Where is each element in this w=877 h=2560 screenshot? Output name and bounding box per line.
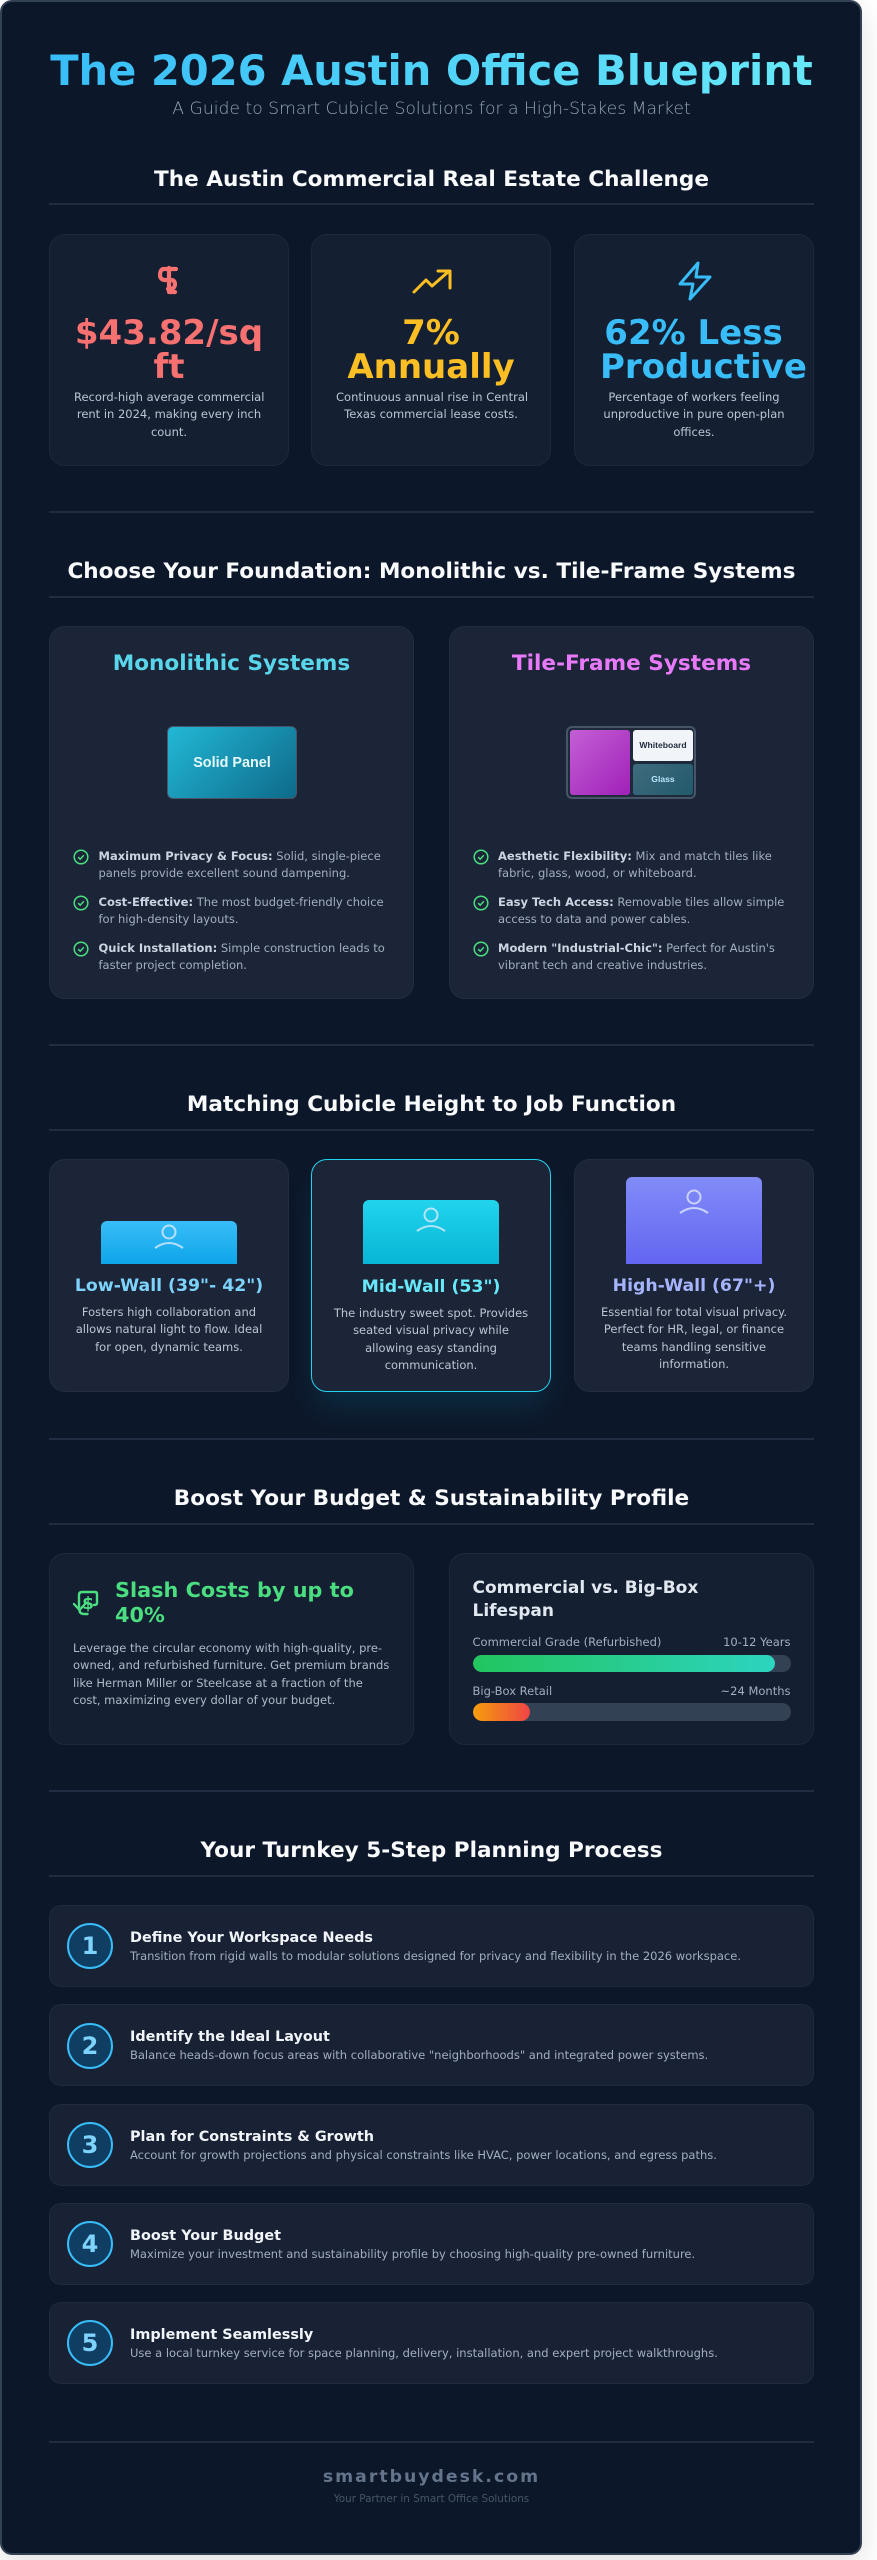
text: rent	[74, 390, 264, 439]
text: mid-wall: The industry sweet spot. Provides	[334, 1306, 528, 1320]
step 3 number: 3	[82, 2131, 98, 2159]
list: monolithic benefits: Cost-Effective: The most budget-friendly choice	[98, 895, 384, 909]
stat: lease: 7%	[402, 313, 460, 353]
list: tile-frame benefits: Modern "Industrial-Chic": Perfect for Austin's	[498, 941, 775, 955]
text: mid-wall: allowing easy standing	[365, 1341, 497, 1355]
panel: productivity stat	[574, 234, 814, 466]
stat: productivity: 62% Less	[604, 313, 783, 353]
step 5 text: Use a local turnkey service for space planning, delivery, installation, and expert project walkthroughs.	[130, 2346, 718, 2360]
text: low-wall	[76, 1305, 262, 1354]
stat: lease	[347, 313, 515, 387]
step 2 number: 2	[82, 2032, 98, 2060]
text: high-wall: Essential for total visual privacy.	[601, 1305, 787, 1319]
heading: slash costs: 40%	[115, 1603, 165, 1627]
heading: high-wall: High-Wall (67"+)	[613, 1276, 775, 1296]
tile frame graphic	[566, 726, 696, 799]
high wall graphic	[626, 1177, 762, 1264]
panel: monolithic	[49, 626, 414, 999]
tile frame graphic: Whiteboard	[639, 740, 687, 750]
bar chart: lifespan	[472, 1635, 791, 1721]
text: mid-wall: seated visual privacy while	[353, 1323, 509, 1337]
text: slash costs: cost, maximizing every dollar of your budget.	[73, 1693, 335, 1707]
heading: tile-frame: Tile-Frame Systems	[512, 651, 751, 676]
text: high-wall: Perfect for HR, legal, or finance	[604, 1322, 784, 1336]
text: productivity: Percentage of workers feeling	[608, 390, 780, 404]
panel: tile-frame	[449, 626, 814, 999]
step 5 title: Implement Seamlessly	[130, 2327, 313, 2343]
text: lease	[336, 390, 528, 421]
step 2 text: Balance heads-down focus areas with collaborative "neighborhoods" and integrated power systems.	[130, 2048, 708, 2062]
text: productivity	[603, 390, 785, 439]
step 3 number	[67, 2122, 113, 2168]
panel: rent stat	[49, 234, 289, 466]
title: The 2026 Austin Office Blueprint	[50, 46, 813, 95]
heading: monolithic: Monolithic Systems	[113, 651, 350, 676]
list: tile-frame benefits: access to data and power cables.	[498, 912, 690, 926]
tile frame graphic: Glass	[651, 774, 675, 784]
text: rent: count.	[151, 425, 187, 439]
list: monolithic benefits: Maximum Privacy & Focus: Solid, single-piece	[98, 849, 381, 863]
bar chart: lifespan: Big-Box Retail	[472, 1684, 552, 1698]
panel: lifespan	[449, 1553, 814, 1745]
step 4 title: Boost Your Budget	[130, 2228, 281, 2244]
text: slash costs	[73, 1641, 389, 1707]
text: slash costs: like Herman Miller or Steelcase at a fraction of the	[73, 1676, 363, 1690]
text: low-wall: Fosters high collaboration and	[82, 1305, 256, 1319]
step 1 text: Transition from rigid walls to modular solutions designed for privacy and flexibility in the 2026 workspace.	[130, 1949, 741, 1963]
panel: mid-wall	[311, 1159, 551, 1392]
list: tile-frame benefits	[473, 849, 784, 972]
heading: slash costs	[115, 1578, 354, 1627]
step 3	[49, 2104, 814, 2186]
text: mid-wall: communication.	[385, 1358, 477, 1372]
text: high-wall	[601, 1305, 787, 1371]
icon: lightning	[678, 262, 712, 300]
list: tile-frame benefits: vibrant tech and creative industries.	[498, 958, 707, 972]
step 4 text: Maximize your investment and sustainability profile by choosing high-quality pre-owned furniture.	[130, 2247, 695, 2261]
heading: slash costs: Slash Costs by up to	[115, 1578, 354, 1602]
bar chart: lifespan: 10-12 Years	[723, 1635, 790, 1649]
text: lease: Texas commercial lease costs.	[344, 407, 518, 421]
text: rent: Record-high average commercial	[74, 390, 264, 404]
list: monolithic benefits: for high-density layouts.	[98, 912, 239, 926]
step 5	[49, 2302, 814, 2384]
panel: low-wall	[49, 1159, 289, 1392]
icon: recycle dollar	[72, 1590, 98, 1616]
heading: lifespan: Lifespan	[472, 1601, 554, 1621]
stat: rent: $43.82/sq	[75, 313, 263, 353]
step 5 number: 5	[82, 2329, 98, 2357]
text: low-wall: for open, dynamic teams.	[95, 1340, 243, 1354]
subtitle: A Guide to Smart Cubicle Solutions for a High-Stakes Market	[172, 99, 691, 119]
icon: recycle dollar: $	[82, 1594, 94, 1614]
heading: challenge: The Austin Commercial Real Estate Challenge	[154, 167, 709, 192]
step 1 title: Define Your Workspace Needs	[130, 1930, 373, 1946]
heading: mid-wall: Mid-Wall (53")	[362, 1277, 500, 1297]
stat: rent	[75, 313, 263, 387]
step 4 number: 4	[82, 2230, 98, 2258]
bar chart: lifespan: Commercial Grade (Refurbished)	[472, 1635, 661, 1649]
step 1	[49, 1905, 814, 1987]
text: productivity: offices.	[673, 425, 715, 439]
list: monolithic benefits: faster project completion.	[98, 958, 247, 972]
list: tile-frame benefits: Aesthetic Flexibility: Mix and match tiles like	[498, 849, 772, 863]
text: slash costs: owned, and refurbished furniture. Get premium brands	[73, 1658, 389, 1672]
icon: dollar	[158, 266, 178, 294]
icon: trending up	[412, 270, 452, 294]
step 2 number	[67, 2023, 113, 2069]
heading: height: Matching Cubicle Height to Job Function	[187, 1092, 676, 1117]
text: high-wall: information.	[659, 1357, 729, 1371]
heading: lifespan: Commercial vs. Big-Box	[472, 1578, 698, 1598]
text: mid-wall	[334, 1306, 528, 1372]
text: high-wall: teams handling sensitive	[622, 1340, 766, 1354]
solid panel graphic: Solid Panel	[193, 755, 271, 771]
step 1 number	[67, 1923, 113, 1969]
low wall graphic	[101, 1221, 237, 1264]
stat: productivity: Productive	[600, 347, 807, 387]
heading: budget: Boost Your Budget & Sustainability Profile	[174, 1486, 689, 1511]
footer tagline: Your Partner in Smart Office Solutions	[334, 2493, 529, 2505]
text: rent: rent in 2024, making every inch	[77, 407, 261, 421]
panel: lease stat	[311, 234, 551, 466]
list: monolithic benefits	[73, 849, 385, 972]
list: tile-frame benefits: fabric, glass, wood, or whiteboard.	[498, 866, 697, 880]
panel: slash costs	[49, 1553, 414, 1745]
list: tile-frame benefits: Easy Tech Access: Removable tiles allow simple	[498, 895, 784, 909]
text: lease: Continuous annual rise in Central	[336, 390, 528, 404]
step 1 number: 1	[82, 1932, 98, 1960]
step 3 text: Account for growth projections and physical constraints like HVAC, power locations, and egress paths.	[130, 2148, 717, 2162]
text: low-wall: allows natural light to flow. Ideal	[76, 1322, 262, 1336]
heading: process: Your Turnkey 5-Step Planning Process	[200, 1838, 663, 1863]
step 3 title: Plan for Constraints & Growth	[130, 2129, 374, 2145]
step 2	[49, 2004, 814, 2086]
list: monolithic benefits: panels provide excellent sound dampening.	[98, 866, 350, 880]
stat: lease: Annually	[347, 347, 515, 387]
list: monolithic benefits: Quick Installation: Simple construction leads to	[98, 941, 385, 955]
heading: lifespan	[472, 1578, 698, 1621]
text: productivity: unproductive in pure open-plan	[603, 407, 785, 421]
heading: foundation: Choose Your Foundation: Monolithic vs. Tile-Frame Systems	[67, 559, 796, 584]
step 4 number	[67, 2221, 113, 2267]
footer brand: smartbuydesk.com	[323, 2467, 540, 2487]
step 5 number	[67, 2320, 113, 2366]
step 4	[49, 2203, 814, 2285]
bar chart: lifespan: ~24 Months	[721, 1684, 790, 1698]
step 2 title: Identify the Ideal Layout	[130, 2029, 330, 2045]
mid wall graphic	[363, 1200, 499, 1264]
stat: rent: ft	[153, 347, 185, 387]
text: slash costs: Leverage the circular economy with high-quality, pre-	[73, 1641, 382, 1655]
panel: high-wall	[574, 1159, 814, 1392]
heading: low-wall: Low-Wall (39"- 42")	[75, 1276, 263, 1296]
stat: productivity	[600, 313, 807, 387]
solid panel graphic	[167, 726, 297, 799]
